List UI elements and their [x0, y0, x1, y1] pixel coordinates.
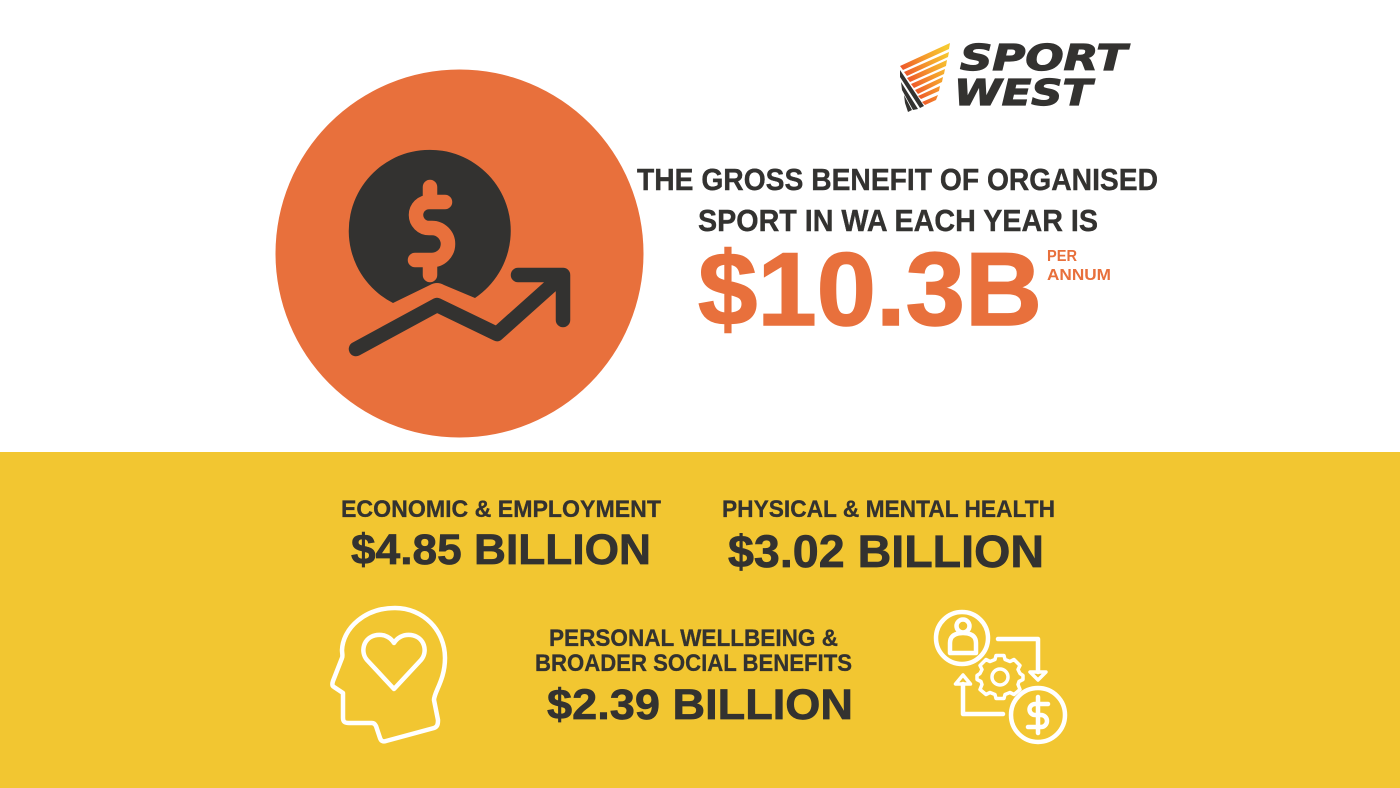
orange circle with coin and growth icon [276, 70, 644, 438]
logo wordmark: SPORT [960, 38, 1130, 79]
stat: economic and employment: $4.85 BILLION [351, 526, 651, 574]
logo mark: stripes [900, 43, 950, 112]
per annum label [1047, 248, 1111, 284]
stat: personal wellbeing and social benefits: BROADER SOCIAL BENEFITS [535, 650, 852, 677]
icon: head with heart [332, 608, 445, 741]
stat: personal wellbeing and social benefits: PERSONAL WELLBEING & [549, 625, 838, 652]
stat: physical and mental health: PHYSICAL & MENTAL HEALTH [722, 496, 1055, 523]
icon: dollar coin [349, 150, 511, 303]
stat: personal wellbeing and social benefits: $2.39 BILLION [547, 681, 853, 729]
headline figure: $10.3B [698, 232, 1042, 348]
panel: yellow band [0, 452, 1400, 788]
stat: personal wellbeing and social benefits [535, 625, 853, 729]
heading: SPORT IN WA EACH YEAR IS [698, 203, 1098, 238]
stat: economic and employment [341, 496, 661, 574]
logo: Sport West [900, 38, 1130, 114]
heading [637, 162, 1158, 238]
heading: THE GROSS BENEFIT OF ORGANISED [637, 162, 1158, 197]
logo wordmark: WEST [954, 73, 1095, 114]
arrow to dollar [998, 639, 1046, 680]
stat: physical and mental health [722, 496, 1055, 577]
arrow to person [956, 675, 1003, 714]
dollar circle [1011, 688, 1065, 742]
background: white panel [0, 0, 1400, 452]
gear [977, 656, 1023, 698]
icon: rising arrow [356, 275, 563, 349]
stat: physical and mental health: $3.02 BILLION [728, 526, 1044, 577]
stat: economic and employment: ECONOMIC & EMPLOYMENT [341, 496, 661, 523]
per annum label: ANNUM [1047, 267, 1111, 284]
person circle [936, 612, 988, 664]
per annum label: PER [1047, 248, 1077, 265]
icon: person, gear and dollar cycle [936, 612, 1065, 742]
logo wordmark [954, 38, 1130, 114]
